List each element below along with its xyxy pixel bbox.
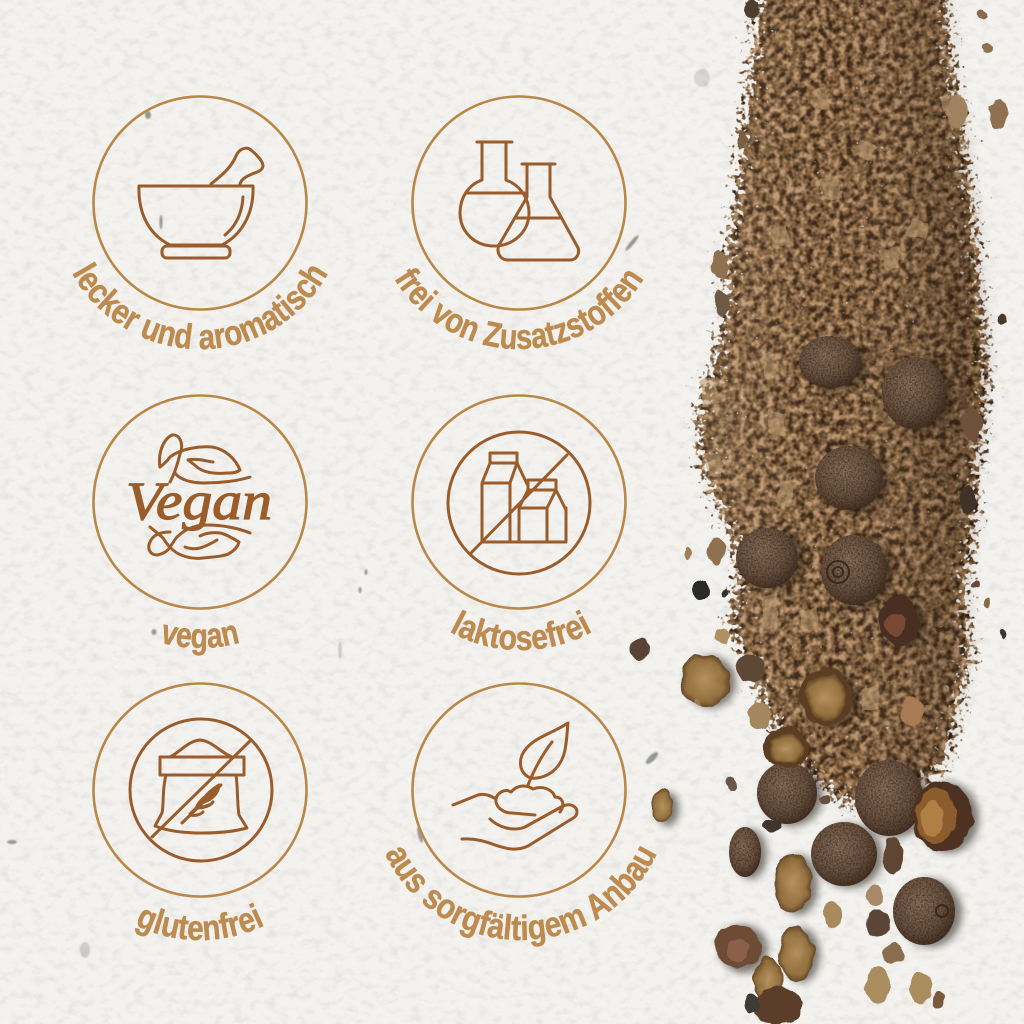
badge: laktosefrei	[411, 394, 627, 650]
berry calyx detail	[827, 561, 948, 917]
icon: laboratory flasks	[460, 142, 579, 260]
badge: glutenfrei	[92, 682, 308, 940]
icon: vegan lettering with leaves	[126, 435, 272, 558]
label: glutenfrei	[135, 902, 264, 940]
scattered crumbs	[631, 1, 1007, 1013]
icon: crossed-out milk cartons	[448, 432, 590, 574]
label: frei von Zusatzstoffen	[395, 268, 644, 350]
pile tonal shading	[704, 0, 980, 800]
broken open shells	[651, 596, 972, 1024]
icon: mortar and pestle	[139, 148, 263, 258]
label: laktosefrei	[450, 610, 592, 650]
badge: frei von Zusatzstoffen	[395, 95, 644, 350]
icon: hand holding a seedling	[453, 723, 577, 849]
badge: vegan	[92, 394, 308, 692]
badge ring	[94, 396, 306, 608]
shadows under peppercorns	[657, 338, 979, 982]
badge ring	[412, 684, 626, 896]
badge ring	[94, 96, 306, 310]
whole allspice berries	[729, 336, 955, 945]
badge ring	[412, 96, 626, 310]
label: lecker und aromatisch	[72, 262, 328, 350]
photo: ground allspice pile	[631, 0, 1007, 1024]
lighter flakes in the pile	[700, 86, 968, 712]
label: aus sorgfältigem Anbau	[386, 846, 657, 947]
badge ring	[94, 684, 306, 896]
icon: crossed-out flour sack	[130, 719, 272, 861]
ground spice mass	[692, 0, 992, 815]
icon: vegan lettering with leaves: Vegan	[126, 471, 272, 531]
badge: aus sorgfältigem Anbau	[386, 682, 657, 947]
label: vegan	[164, 624, 239, 656]
badge ring	[412, 396, 626, 608]
badge: lecker und aromatisch	[72, 95, 328, 350]
